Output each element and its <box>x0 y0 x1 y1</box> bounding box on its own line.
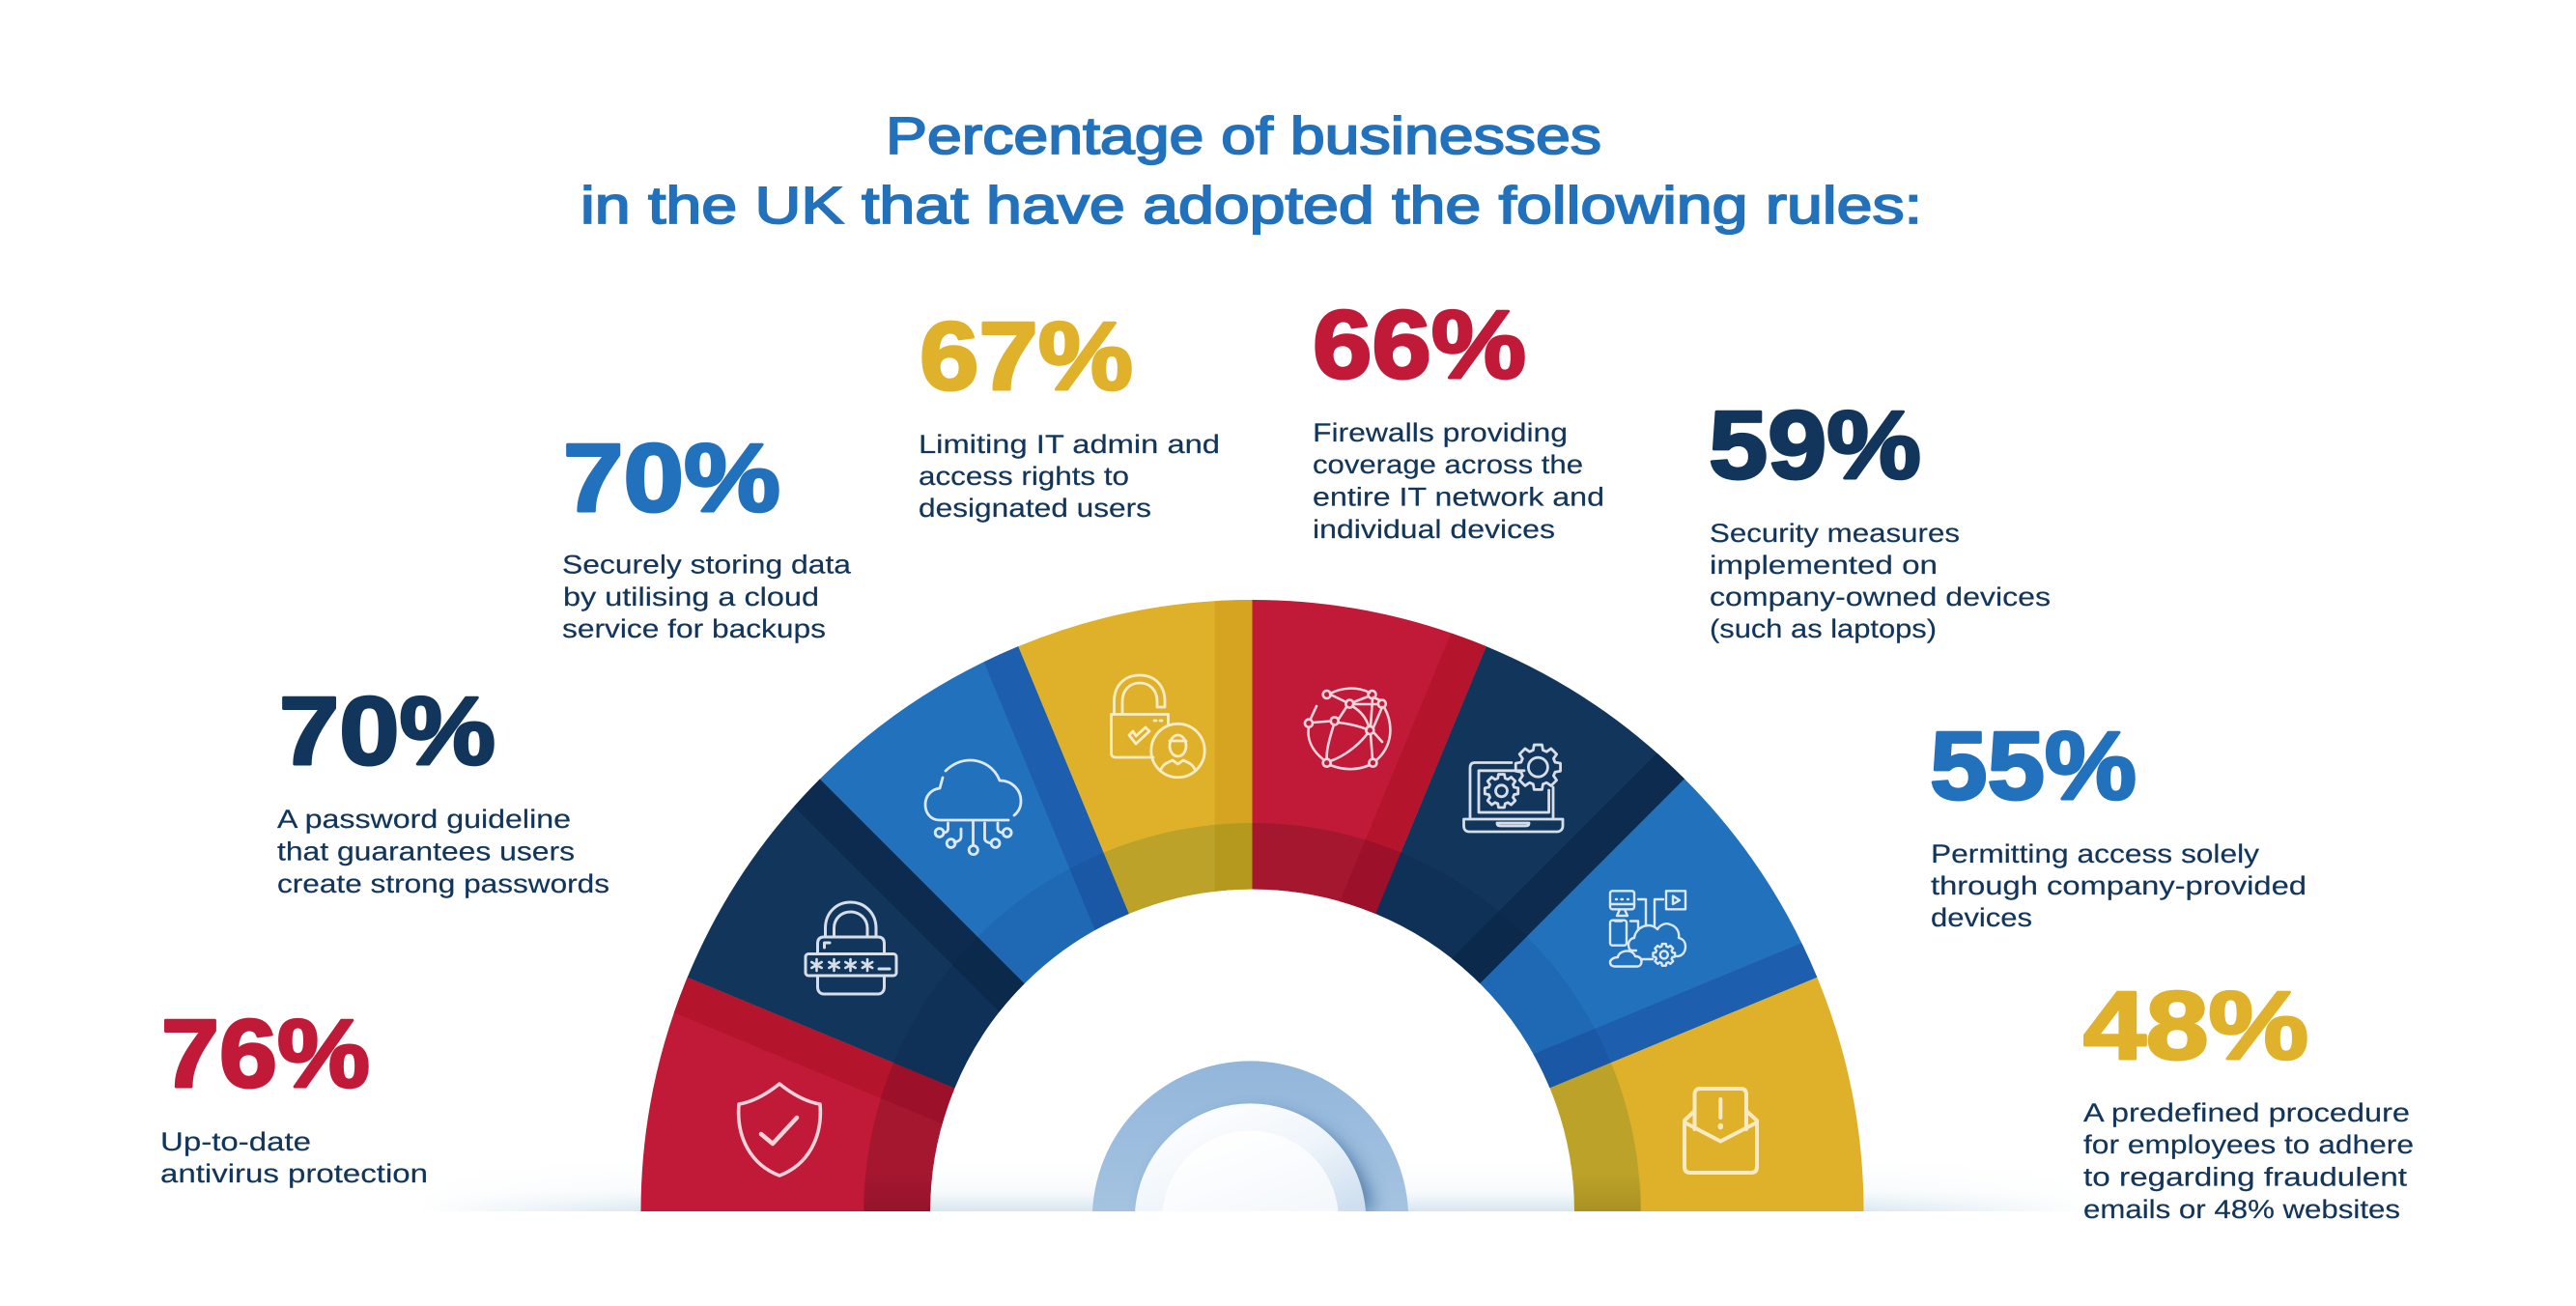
stat: 70% password guideline: that guarantees users <box>277 837 575 866</box>
stat: 55% company-provided devices: devices <box>1931 903 2032 932</box>
stat: 48% fraudulent emails: A predefined procedure <box>2083 1098 2410 1127</box>
stat: 70% password guideline: 70% <box>279 677 495 785</box>
stat: 48% fraudulent emails: for employees to adhere <box>2083 1130 2414 1159</box>
stat: 67% admin rights: Limiting IT admin and <box>919 430 1220 459</box>
stat: 66% firewalls: Firewalls providing <box>1313 418 1568 447</box>
stat: 55% company-provided devices: Permitting access solely <box>1931 839 2260 868</box>
stat: 67% admin rights: access rights to <box>919 462 1129 491</box>
semicircle chart <box>598 556 1864 1306</box>
stat: 76% antivirus: 76% <box>161 1000 370 1108</box>
title: in the UK that have adopted the following rules: <box>580 177 1922 235</box>
stat: 59% security measures: (such as laptops) <box>1710 614 1937 643</box>
segment: cloud blue <box>802 646 1139 1026</box>
icon: padlock and user <box>1111 675 1204 778</box>
stat: 66% firewalls: coverage across the <box>1313 450 1583 479</box>
centre rings <box>1092 1061 1408 1211</box>
segment: antivirus red <box>598 978 977 1306</box>
stat: 59% security measures: company-owned devices <box>1710 582 2051 611</box>
stat: 59% security measures <box>1709 391 2051 643</box>
icon: envelope alert <box>1684 1089 1757 1173</box>
stat: 70% password guideline: create strong passwords <box>277 869 609 898</box>
icon: network globe <box>1305 689 1390 769</box>
base shading on inner band <box>863 1173 1641 1211</box>
stat: 70% cloud backups: Securely storing data <box>562 551 852 580</box>
segment: company devices navy <box>1297 613 1684 1001</box>
stat: 76% antivirus: antivirus protection <box>160 1159 428 1188</box>
segment: firewalls red <box>1150 556 1486 936</box>
title <box>580 107 1922 235</box>
stat: 55% company-provided devices: 55% <box>1930 712 2137 820</box>
stat: 76% antivirus <box>160 1000 428 1188</box>
stat: 70% cloud backups: service for backups <box>562 614 826 643</box>
stat: 48% fraudulent emails: emails or 48% websites <box>2083 1195 2400 1224</box>
icon: password lock <box>806 902 896 994</box>
stat: 67% admin rights: designated users <box>919 494 1151 523</box>
segment: provided devices blue <box>1437 761 1817 1097</box>
stat: 48% fraudulent emails: to regarding fraudulent <box>2083 1163 2408 1192</box>
infographic canvas <box>161 115 2413 1219</box>
segment: password navy <box>655 779 1042 1166</box>
stat: 76% antivirus: Up-to-date <box>160 1127 311 1156</box>
stat: 70% cloud backups: 70% <box>563 424 780 532</box>
stat: 55% company-provided devices: through company-provided <box>1931 871 2307 900</box>
stat: 70% password guideline: A password guideline <box>277 805 571 834</box>
stat: 67% admin rights: 67% <box>920 302 1133 411</box>
icon: cloud circuit <box>925 760 1021 855</box>
icon: connected devices and cloud <box>1610 891 1685 966</box>
stat: 48% fraudulent emails <box>2083 972 2414 1224</box>
stat: 70% cloud backups: by utilising a cloud <box>563 582 819 611</box>
stat: 66% firewalls: 66% <box>1313 291 1526 399</box>
stat: 59% security measures: Security measures <box>1710 519 1960 548</box>
segment: access rights yellow <box>1018 600 1252 914</box>
segment: fraudulent email yellow <box>1550 978 1864 1211</box>
stat: 55% company-provided devices <box>1930 712 2307 932</box>
stat: 66% firewalls: entire IT network and <box>1313 483 1604 512</box>
icon: shield <box>739 1084 820 1176</box>
stat: 66% firewalls: individual devices <box>1313 515 1555 544</box>
icon: laptop with gears <box>1464 745 1563 832</box>
baseline fade strip <box>467 1192 2044 1211</box>
stat: 59% security measures: implemented on <box>1710 551 1938 580</box>
stat: 70% cloud backups <box>562 424 852 643</box>
stat: 67% admin rights <box>919 302 1220 523</box>
stat: 66% firewalls <box>1313 291 1604 544</box>
title: Percentage of businesses <box>886 107 1601 165</box>
stat: 59% security measures: 59% <box>1709 391 1921 499</box>
stat: 48% fraudulent emails: 48% <box>2083 972 2308 1080</box>
stat: 70% password guideline <box>277 677 609 898</box>
